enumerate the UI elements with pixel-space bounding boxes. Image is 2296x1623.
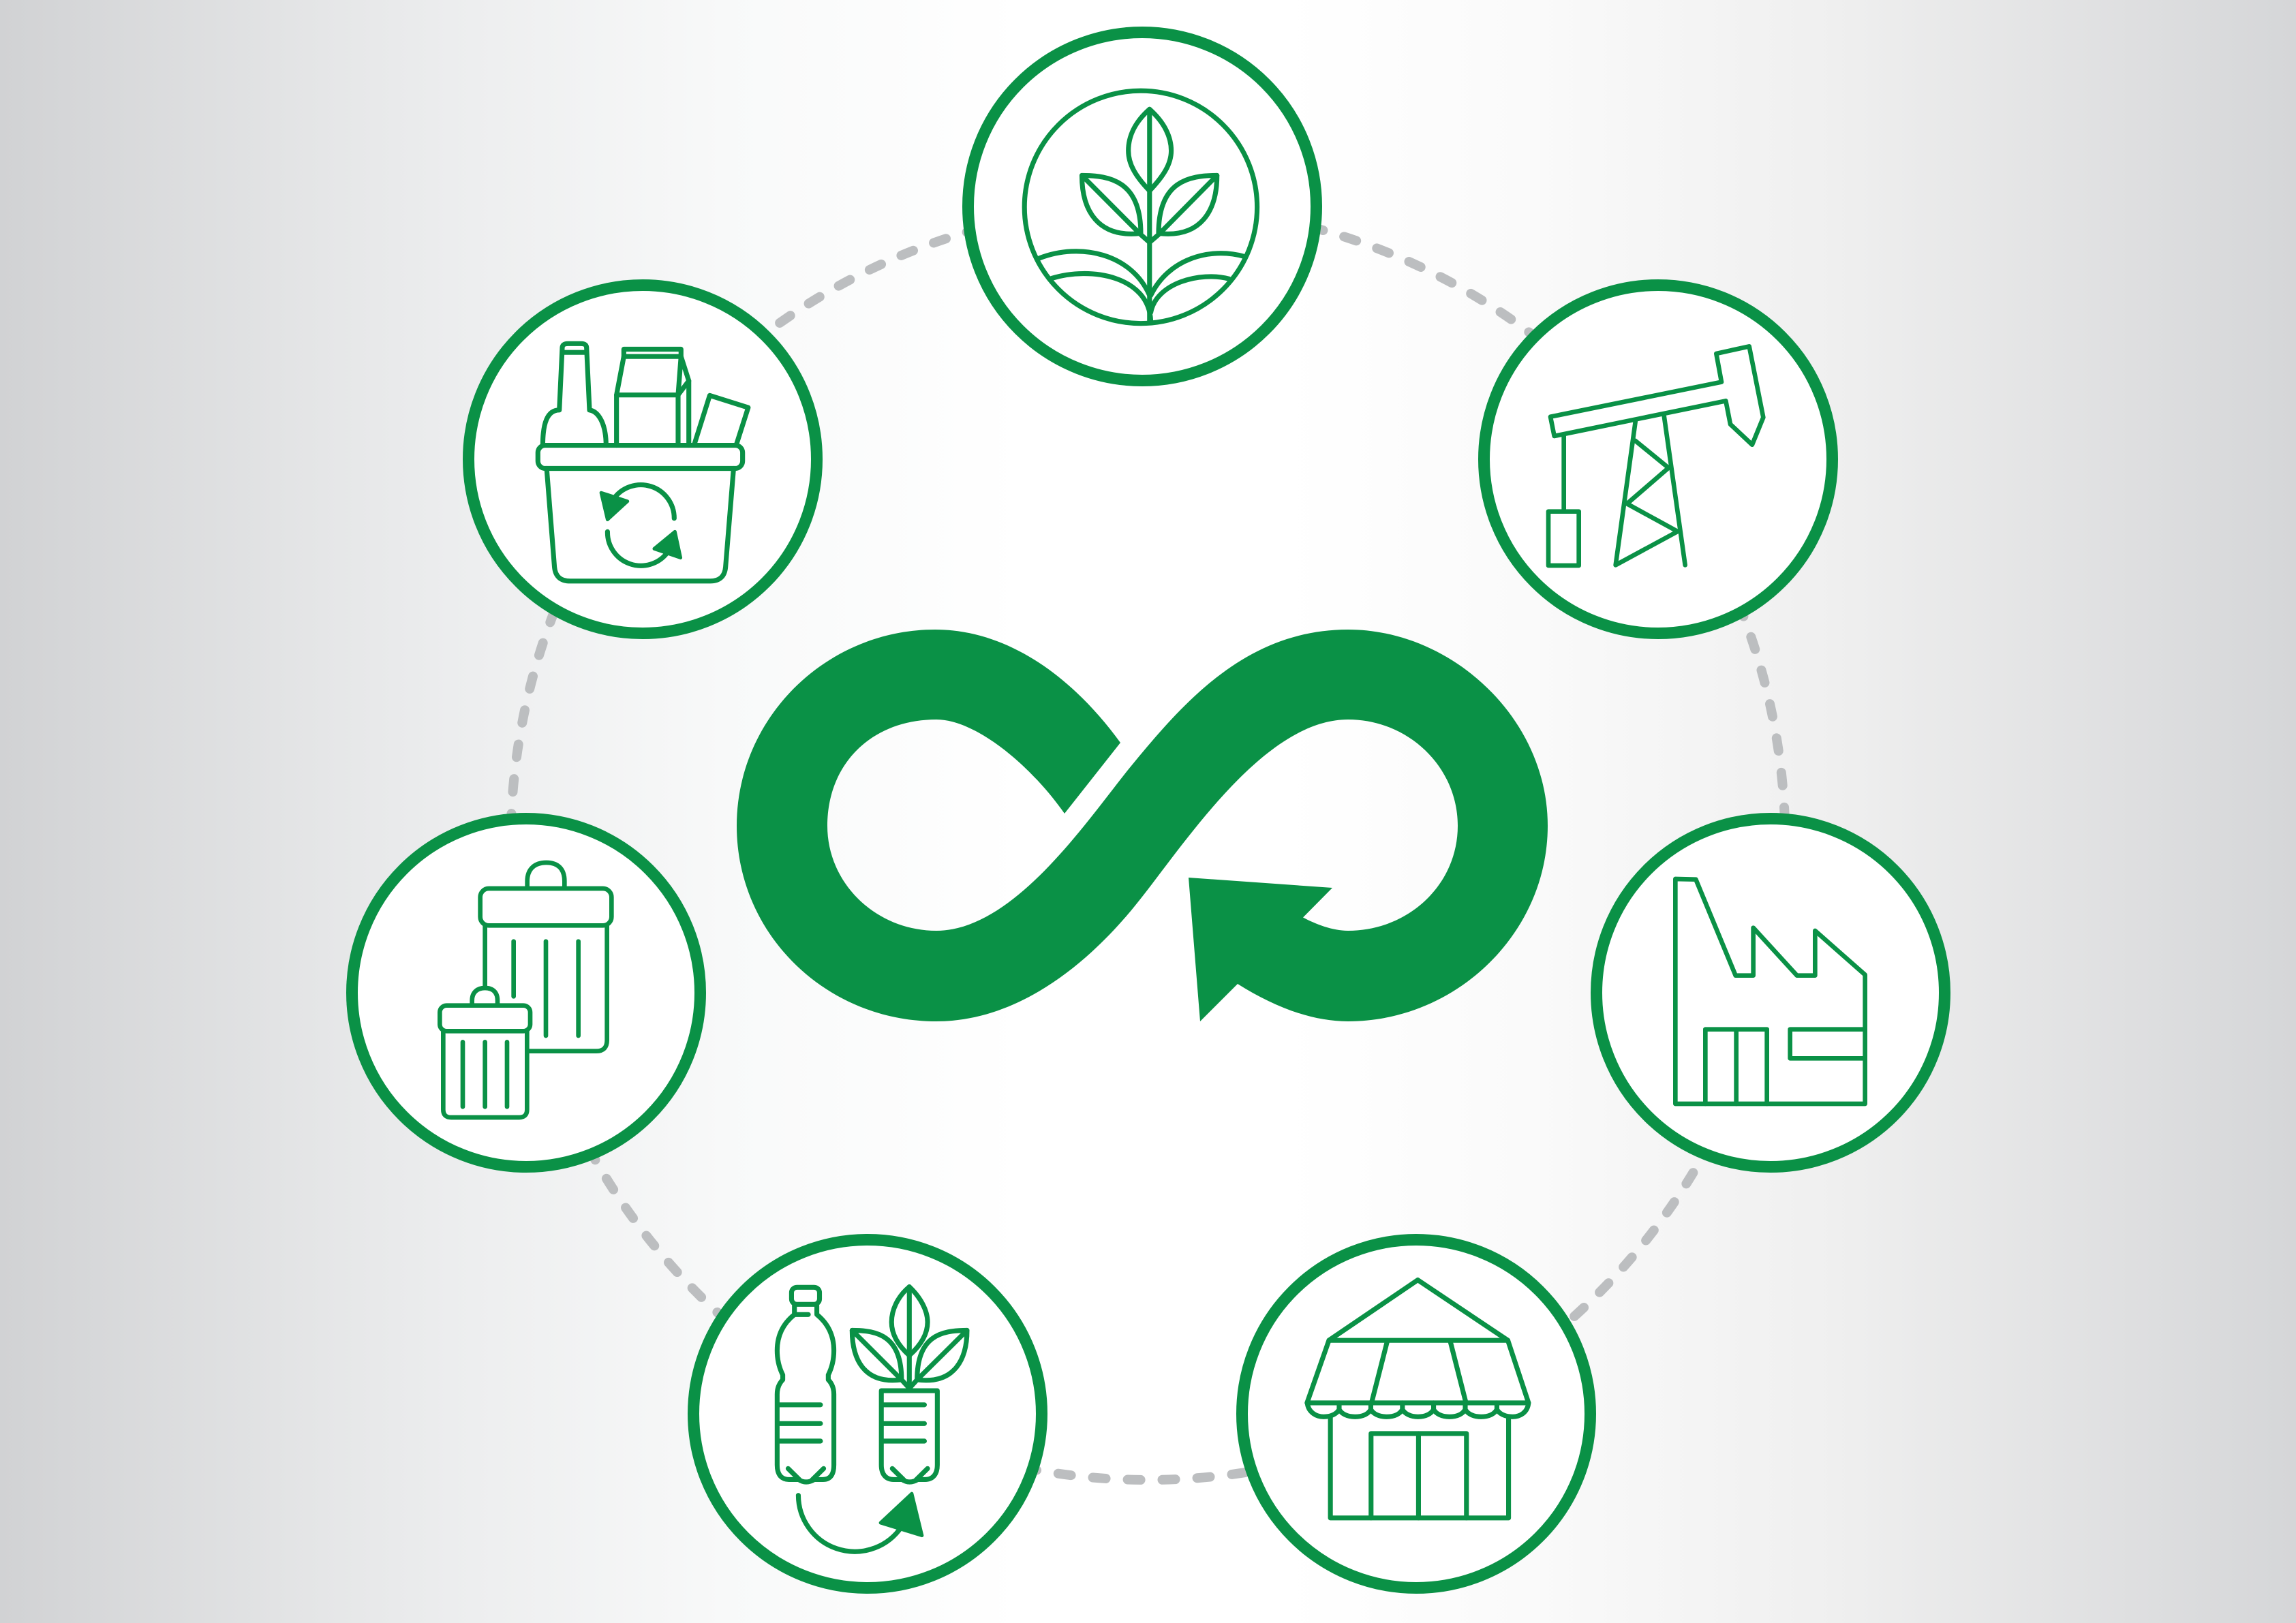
icon: storefront with awning <box>1307 1280 1529 1518</box>
icon: factory building <box>1675 879 1865 1104</box>
ring: factory <box>1596 819 1945 1166</box>
ring: recycling basket <box>469 285 816 634</box>
recycle arrow heads <box>601 493 681 558</box>
central infinity arrow <box>737 630 1548 1021</box>
icon: two waste bins <box>440 863 611 1117</box>
icon: bottle turned into a plant pot <box>777 1287 967 1551</box>
panel: recycling basket <box>469 285 816 634</box>
planter with leaves <box>798 1287 967 1551</box>
icon: sprouting plant in a circle <box>1024 91 1257 324</box>
icon: oil pumpjack <box>1548 346 1763 566</box>
ring: plant <box>968 33 1317 380</box>
icon: basket of packaging with recycle arrows <box>538 343 748 581</box>
ring: bottle reuse <box>694 1240 1041 1588</box>
panel: bottle reuse as planter <box>694 1240 1041 1588</box>
panel: factory, production <box>1596 819 1945 1166</box>
ring: trash bins <box>352 819 701 1166</box>
panel: oil pump, fossil resources <box>1484 285 1832 634</box>
panel: shop, retail <box>1242 1240 1591 1588</box>
ring: oil pump <box>1484 285 1832 634</box>
panel: trash bins, waste <box>352 819 701 1166</box>
basket and contents <box>538 343 748 581</box>
arrow head <box>881 1494 922 1536</box>
bottle <box>777 1287 834 1482</box>
panel: plant, renewable resources <box>968 33 1317 380</box>
ring: shop <box>1242 1240 1591 1588</box>
dashed cycle ring connecting the icons <box>511 206 1786 1480</box>
